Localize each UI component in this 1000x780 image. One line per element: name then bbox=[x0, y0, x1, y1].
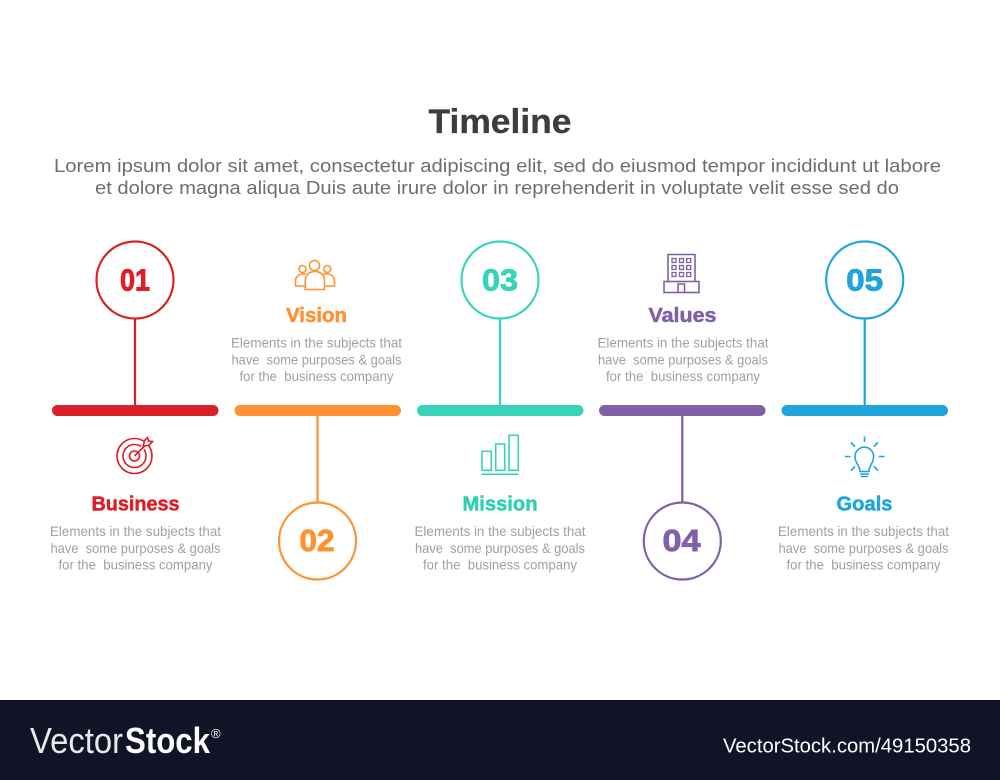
number circle 05: 05 bbox=[846, 262, 883, 298]
description 02 bbox=[231, 334, 402, 384]
footer logo: Stock bbox=[125, 720, 211, 761]
step 03: Mission bbox=[414, 242, 586, 572]
connector 04 bbox=[681, 415, 683, 503]
number circle 05 bbox=[826, 242, 903, 318]
number circle 01 bbox=[96, 242, 174, 318]
connector 05 bbox=[864, 318, 866, 406]
step 02: Vision bbox=[231, 260, 402, 580]
number circle 02 bbox=[279, 502, 356, 580]
label: Goals: Goals bbox=[836, 494, 892, 516]
bar 05 bbox=[782, 405, 948, 416]
bar 03 bbox=[417, 405, 584, 416]
bar 02 bbox=[234, 405, 401, 416]
footer logo bbox=[30, 720, 221, 761]
description 01: for the business company bbox=[58, 556, 212, 572]
bar 01 bbox=[52, 405, 218, 416]
description 04: Elements in the subjects that bbox=[598, 334, 769, 350]
connector 03 bbox=[499, 318, 501, 406]
number circle 04 bbox=[644, 502, 721, 580]
description 04 bbox=[598, 334, 769, 384]
description 04: have some purposes & goals bbox=[598, 352, 768, 368]
description 05 bbox=[778, 523, 949, 572]
connector 02 bbox=[316, 415, 319, 503]
label: Vision: Vision bbox=[286, 305, 347, 327]
number circle 04: 04 bbox=[662, 523, 701, 558]
intro text: Lorem ipsum dolor sit amet, consectetur adipiscing elit, sed do eiusmod tempor incididunt ut labore bbox=[54, 155, 941, 176]
description 05: Elements in the subjects that bbox=[778, 523, 949, 539]
description 02: have some purposes & goals bbox=[232, 352, 402, 368]
footer logo: ® bbox=[211, 726, 221, 741]
intro text bbox=[54, 155, 941, 198]
icon: target bbox=[117, 438, 152, 474]
description 05: have some purposes & goals bbox=[778, 540, 948, 556]
footer logo: Vector bbox=[30, 720, 123, 761]
description 05: for the business company bbox=[786, 556, 940, 572]
label: Business: Business bbox=[92, 494, 180, 516]
step 05: Goals bbox=[778, 242, 949, 572]
label: Mission: Mission bbox=[462, 494, 538, 516]
description 03 bbox=[414, 523, 586, 572]
intro text: et dolore magna aliqua Duis aute irure dolor in reprehenderit in voluptate velit esse sed do bbox=[95, 177, 899, 198]
step 04: Values bbox=[598, 254, 769, 580]
description 02: for the business company bbox=[240, 368, 394, 384]
description 03: have some purposes & goals bbox=[415, 540, 585, 556]
step 01: Business bbox=[50, 242, 221, 572]
description 03: Elements in the subjects that bbox=[414, 523, 586, 539]
icon: people bbox=[295, 260, 335, 290]
description 04: for the business company bbox=[606, 368, 760, 384]
number circle 03 bbox=[462, 242, 538, 318]
footer url: VectorStock.com/49150358 bbox=[723, 736, 971, 758]
number circle 03: 03 bbox=[482, 262, 518, 298]
description 02: Elements in the subjects that bbox=[231, 334, 402, 350]
description 03: for the business company bbox=[423, 556, 577, 572]
description 01: have some purposes & goals bbox=[50, 540, 220, 556]
number circle 02: 02 bbox=[300, 523, 334, 558]
title: Timeline bbox=[428, 103, 572, 141]
icon: light bulb bbox=[845, 436, 884, 476]
bar 04 bbox=[599, 405, 766, 416]
number circle 01: 01 bbox=[120, 262, 150, 298]
description 01 bbox=[50, 523, 221, 572]
icon: building bbox=[664, 254, 699, 292]
description 01: Elements in the subjects that bbox=[50, 523, 221, 539]
footer bar bbox=[0, 700, 1000, 780]
connector 01 bbox=[134, 318, 136, 406]
label: Values: Values bbox=[648, 305, 716, 327]
icon: bar chart bbox=[482, 435, 518, 474]
